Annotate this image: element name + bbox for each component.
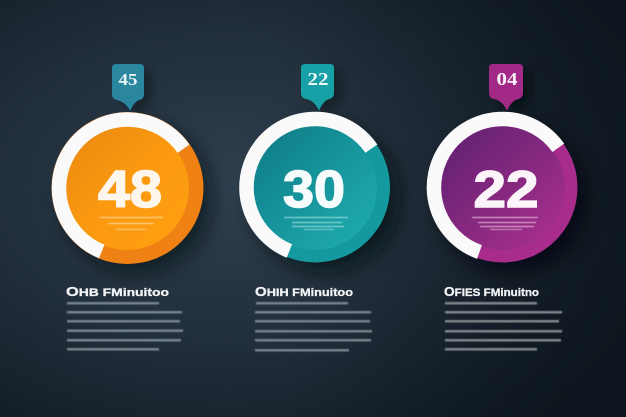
- text block: [67, 302, 183, 350]
- text block: [255, 302, 372, 352]
- caption lines: [100, 217, 163, 230]
- chart: orange ring gauge 48: [52, 112, 213, 274]
- caption lines: [284, 217, 348, 230]
- panel: teal column: [240, 64, 400, 352]
- icon: teal column pin badge: 22: [308, 69, 328, 89]
- text block: [445, 302, 562, 350]
- heading: OFIES FMinuitno: [444, 284, 539, 299]
- icon: teal column pin badge: [301, 64, 342, 116]
- icon: purple column pin badge: 04: [496, 69, 518, 89]
- panel: orange column: [52, 64, 213, 350]
- icon: orange column pin badge: [112, 64, 152, 116]
- caption lines: [472, 217, 538, 230]
- icon: purple column pin badge: [489, 64, 530, 116]
- chart: teal ring gauge 30: [240, 112, 400, 273]
- value: 22: [474, 161, 538, 219]
- heading: OHIH FMinuitoo: [255, 284, 353, 299]
- value: 30: [283, 161, 345, 219]
- chart: purple ring gauge 22: [428, 112, 587, 273]
- icon: orange column pin badge: 45: [118, 70, 138, 89]
- value: 48: [98, 161, 162, 219]
- heading: OHB FMinuitoo: [66, 284, 169, 299]
- panel: purple column: [428, 64, 587, 350]
